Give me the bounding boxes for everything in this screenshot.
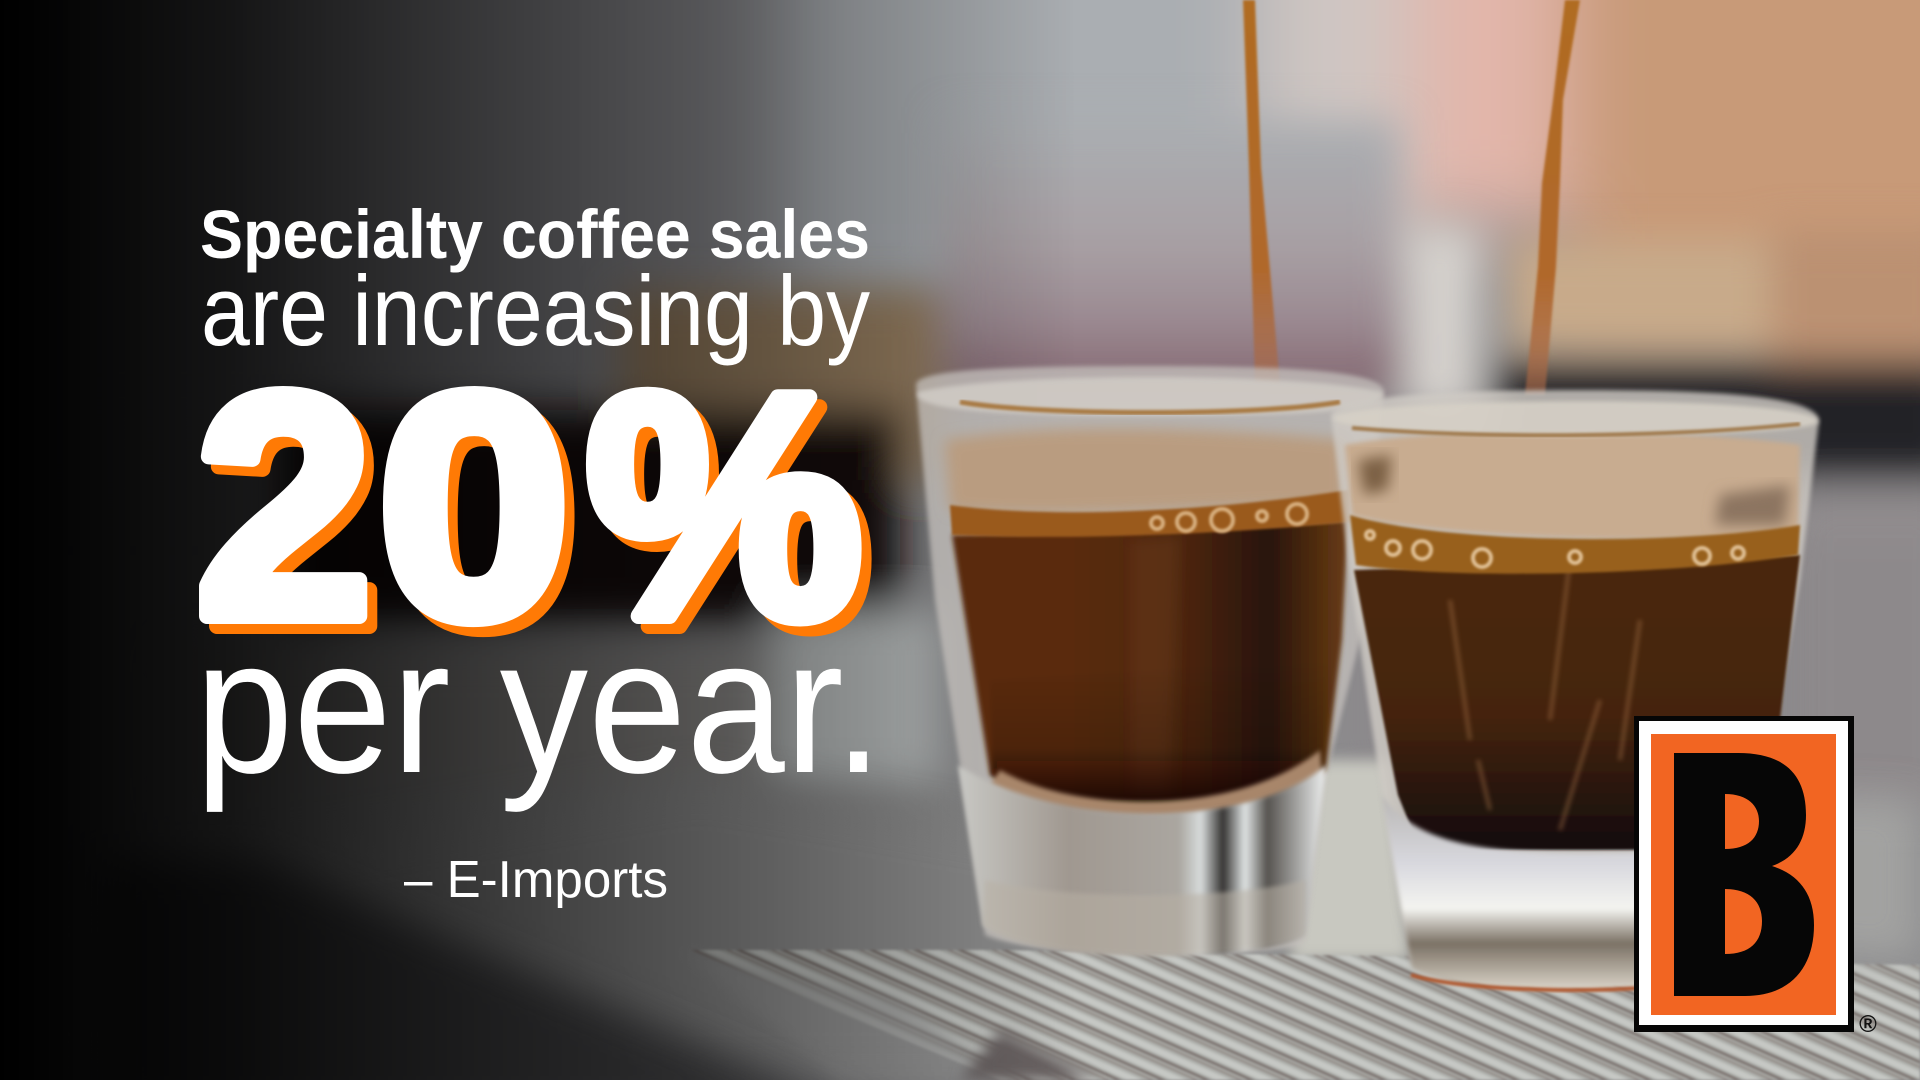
right espresso glass bbox=[1331, 390, 1819, 990]
big number shadow: 20 percent bbox=[206, 339, 872, 694]
text: are increasing by: are increasing by bbox=[201, 255, 870, 366]
glass foot bbox=[958, 765, 1326, 955]
crema bubbles bbox=[1151, 504, 1307, 531]
big number: 20 percent: % bbox=[586, 329, 862, 684]
glass rim bbox=[1333, 401, 1818, 436]
coffee stream right bbox=[1525, 0, 1580, 395]
big number shadow: 20 percent: % bbox=[596, 339, 872, 694]
crema band bbox=[1350, 515, 1800, 574]
coffee body bbox=[952, 520, 1348, 806]
text: per year.: per year. bbox=[195, 598, 883, 813]
glass rim bbox=[918, 377, 1383, 416]
crema bubbles bbox=[1366, 531, 1744, 567]
left espresso glass bbox=[916, 366, 1384, 955]
crema band bbox=[950, 490, 1350, 537]
big number: 20 percent: 2 bbox=[196, 329, 372, 684]
dark machine edge bbox=[100, 860, 880, 1080]
text: Specialty coffee sales: Specialty coffee sales bbox=[200, 196, 870, 273]
big number shadow: 20 percent: 2 bbox=[206, 339, 382, 694]
foam residue bbox=[945, 428, 1345, 513]
drip tray grates bbox=[690, 950, 1920, 1080]
coffee body bbox=[1354, 555, 1800, 850]
coffee stream left bbox=[1243, 0, 1280, 385]
text: source E-Imports: – E-Imports bbox=[404, 851, 668, 909]
registered trademark: ® bbox=[1859, 1011, 1877, 1038]
foam residue bbox=[1345, 432, 1800, 538]
big number: 20 percent bbox=[196, 329, 862, 684]
brand logo: B bbox=[1634, 716, 1854, 1032]
logo letter B bbox=[1674, 753, 1814, 996]
light counter between glasses bbox=[1290, 760, 1410, 960]
headline text block bbox=[195, 196, 883, 909]
big number shadow: 20 percent: 0 bbox=[388, 339, 580, 694]
counter surface bbox=[0, 780, 1920, 1080]
glass foot bbox=[1382, 795, 1730, 990]
big number: 20 percent: 0 bbox=[378, 329, 570, 684]
